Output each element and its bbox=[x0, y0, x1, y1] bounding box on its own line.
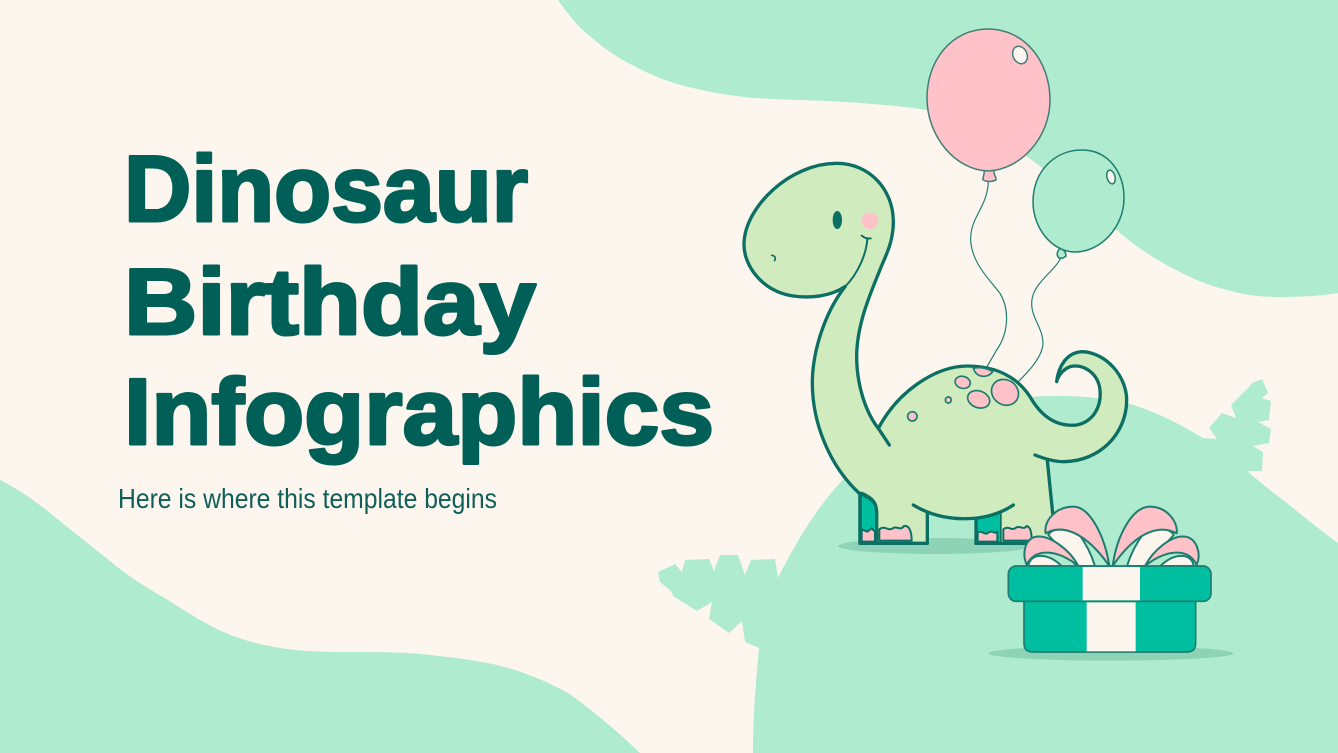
background blob: bottom left bbox=[0, 480, 640, 753]
far legs bbox=[860, 490, 1002, 543]
dinosaur bbox=[744, 163, 1127, 543]
body outline bbox=[744, 163, 1127, 543]
cheek bbox=[862, 212, 878, 229]
green balloon bbox=[1033, 150, 1124, 258]
title: Infographics bbox=[124, 359, 714, 464]
title bbox=[124, 136, 714, 464]
pink balloon bbox=[927, 29, 1050, 182]
gift lid bbox=[1008, 566, 1211, 601]
back spots bbox=[908, 368, 1024, 421]
background hill with palm leaves bbox=[658, 379, 1338, 753]
base ribbon bbox=[1087, 602, 1136, 651]
bow bbox=[1024, 507, 1199, 566]
title: Dinosaur bbox=[124, 136, 528, 241]
subtitle: Here is where this template begins bbox=[118, 483, 497, 514]
balloon strings bbox=[971, 180, 1062, 382]
gift base bbox=[1024, 601, 1196, 652]
eye bbox=[833, 211, 842, 229]
smile bbox=[845, 236, 871, 287]
ground shadow: dinosaur bbox=[838, 538, 1032, 554]
title: Birthday bbox=[124, 249, 536, 354]
nostril bbox=[772, 255, 775, 261]
lid ribbon bbox=[1083, 567, 1140, 600]
toes bbox=[862, 526, 1032, 542]
body bbox=[744, 163, 1127, 543]
gift bbox=[989, 507, 1233, 661]
gift shadow bbox=[989, 646, 1233, 661]
background blob: top right bbox=[558, 0, 1338, 297]
